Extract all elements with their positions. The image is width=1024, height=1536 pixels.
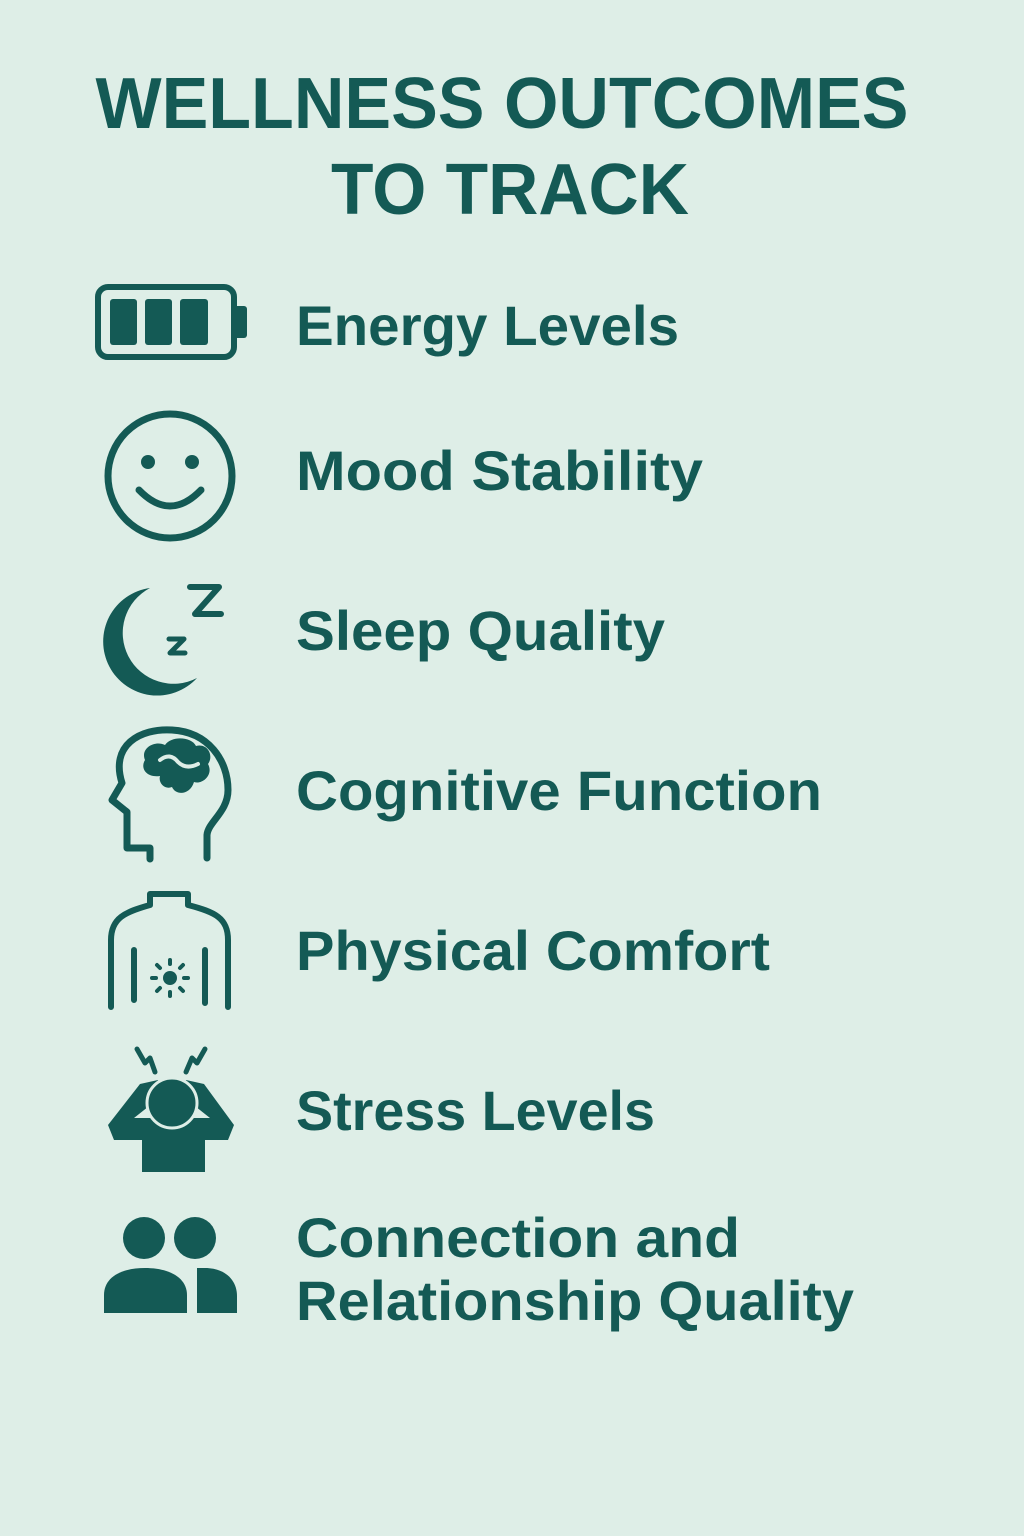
item: connection and relationship quality (104, 1206, 854, 1332)
label: sleep quality: Sleep Quality (296, 599, 665, 662)
label: stress levels: Stress Levels (296, 1079, 655, 1142)
icon: torso (111, 894, 228, 1007)
item: stress levels (108, 1049, 655, 1172)
item: sleep quality (103, 587, 665, 696)
icon: smiley (108, 414, 232, 538)
title: TO TRACK (331, 150, 689, 230)
icon: head with brain (112, 730, 228, 859)
title: WELLNESS OUTCOMES (96, 64, 908, 144)
item: energy levels (98, 287, 679, 357)
title (96, 64, 908, 230)
label: cognitive function: Cognitive Function (296, 759, 822, 822)
icon: two people (104, 1217, 237, 1313)
item: mood stability (108, 414, 703, 538)
item: cognitive function (112, 730, 822, 859)
label: energy levels: Energy Levels (296, 294, 679, 357)
label: mood stability: Mood Stability (296, 439, 703, 502)
item: physical comfort (111, 894, 770, 1007)
label: physical comfort: Physical Comfort (296, 919, 770, 982)
label: connection and relationship quality (296, 1206, 854, 1332)
icon: stressed person (108, 1049, 234, 1172)
label: connection and relationship quality: Connection and (296, 1206, 740, 1269)
label: connection and relationship quality: Relationship Quality (296, 1269, 854, 1332)
icon: battery (98, 287, 247, 357)
icon: moon with z (103, 587, 221, 696)
